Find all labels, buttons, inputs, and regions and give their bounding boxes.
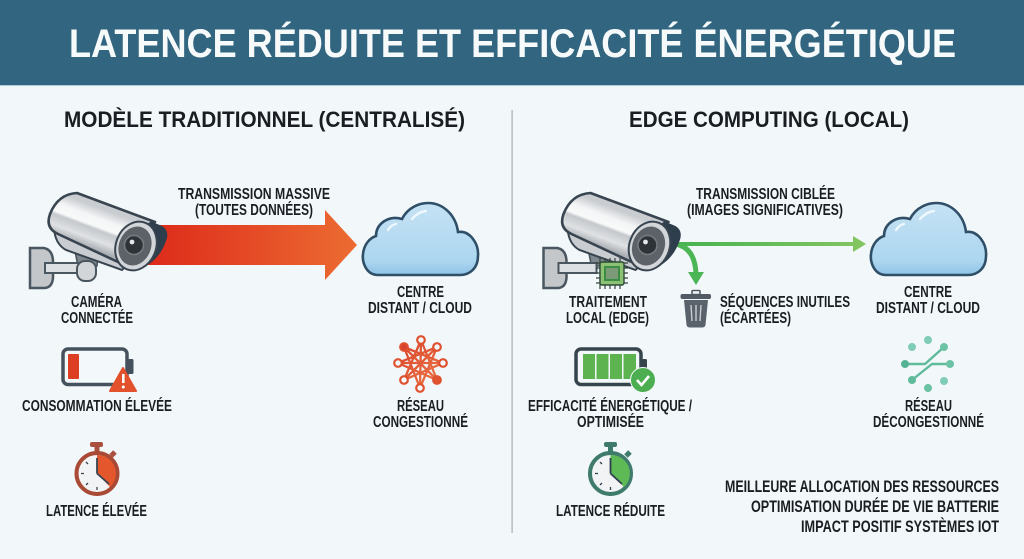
label: targeted transmission: (IMAGES SIGNIFICATIVES)	[687, 202, 843, 219]
label: transmission massive: TRANSMISSION MASSIVE	[178, 186, 330, 203]
label: energy efficiency	[528, 398, 693, 431]
icon: camera	[30, 193, 167, 288]
label: camera: CAMÉRA	[71, 294, 122, 311]
label: remote cloud: DISTANT / CLOUD	[876, 300, 980, 317]
label: camera	[61, 294, 133, 327]
label: congested network: CONGESTIONNÉ	[373, 414, 468, 431]
label: decongested network: RÉSEAU	[905, 398, 952, 415]
label: remote cloud: CENTRE	[904, 284, 952, 301]
icon: cloud	[871, 203, 986, 275]
title: LATENCE RÉDUITE ET EFFICACITÉ ÉNERGÉTIQUE	[69, 21, 956, 66]
label: reduced latency: LATENCE RÉDUITE	[556, 503, 665, 520]
icon: low battery warning	[63, 349, 136, 391]
icon: red stopwatch	[76, 442, 118, 494]
icon: camera with chip	[544, 193, 681, 289]
label: targeted transmission: TRANSMISSION CIBLÉE	[696, 186, 835, 203]
arrow: discarded sequences	[676, 244, 696, 274]
heading: edge computing: EDGE COMPUTING (LOCAL)	[629, 107, 909, 132]
label: high consumption: CONSOMMATION ÉLEVÉE	[22, 398, 172, 415]
benefits list	[725, 478, 999, 536]
header banner	[0, 0, 1024, 86]
icon: cloud	[363, 203, 478, 275]
label: energy efficiency: OPTIMISÉE	[577, 414, 644, 431]
label: useless sequences: (ÉCARTÉES)	[720, 310, 791, 327]
icon: trash can	[680, 290, 711, 328]
icon: green stopwatch	[590, 442, 631, 494]
label: energy efficiency: EFFICACITÉ ÉNERGÉTIQUE /	[528, 398, 693, 415]
label: remote cloud	[876, 284, 980, 317]
label: remote cloud	[368, 284, 472, 317]
arrow: massive transmission	[148, 210, 357, 280]
label: targeted transmission	[687, 186, 843, 219]
heading: traditional model: MODÈLE TRADITIONNEL (CENTRALISÉ)	[64, 107, 465, 132]
label: useless sequences: SÉQUENCES INUTILES	[720, 294, 850, 311]
icon: decongested network	[901, 336, 954, 392]
icon: full battery with check	[576, 349, 656, 392]
panel: traditional model	[22, 186, 478, 520]
central divider	[512, 110, 513, 533]
panel: edge computing	[528, 186, 999, 536]
label: high latency: LATENCE ÉLEVÉE	[46, 503, 147, 520]
label: transmission massive: (TOUTES DONNÉES)	[195, 202, 313, 219]
label: decongested network: DÉCONGESTIONNÉ	[873, 414, 984, 431]
label: local processing: LOCAL (EDGE)	[566, 310, 649, 327]
label: camera: CONNECTÉE	[61, 310, 133, 327]
label: decongested network	[873, 398, 984, 431]
label: local processing: TRAITEMENT	[569, 294, 647, 311]
label: local processing	[566, 294, 649, 327]
label: transmission massive	[178, 186, 330, 219]
label: remote cloud: CENTRE	[397, 284, 444, 301]
icon: congested network	[394, 336, 447, 392]
label: congested network	[373, 398, 468, 431]
arrow: targeted transmission	[676, 236, 866, 252]
label: remote cloud: DISTANT / CLOUD	[368, 300, 472, 317]
label: useless sequences	[720, 294, 850, 327]
label: congested network: RÉSEAU	[397, 398, 444, 415]
